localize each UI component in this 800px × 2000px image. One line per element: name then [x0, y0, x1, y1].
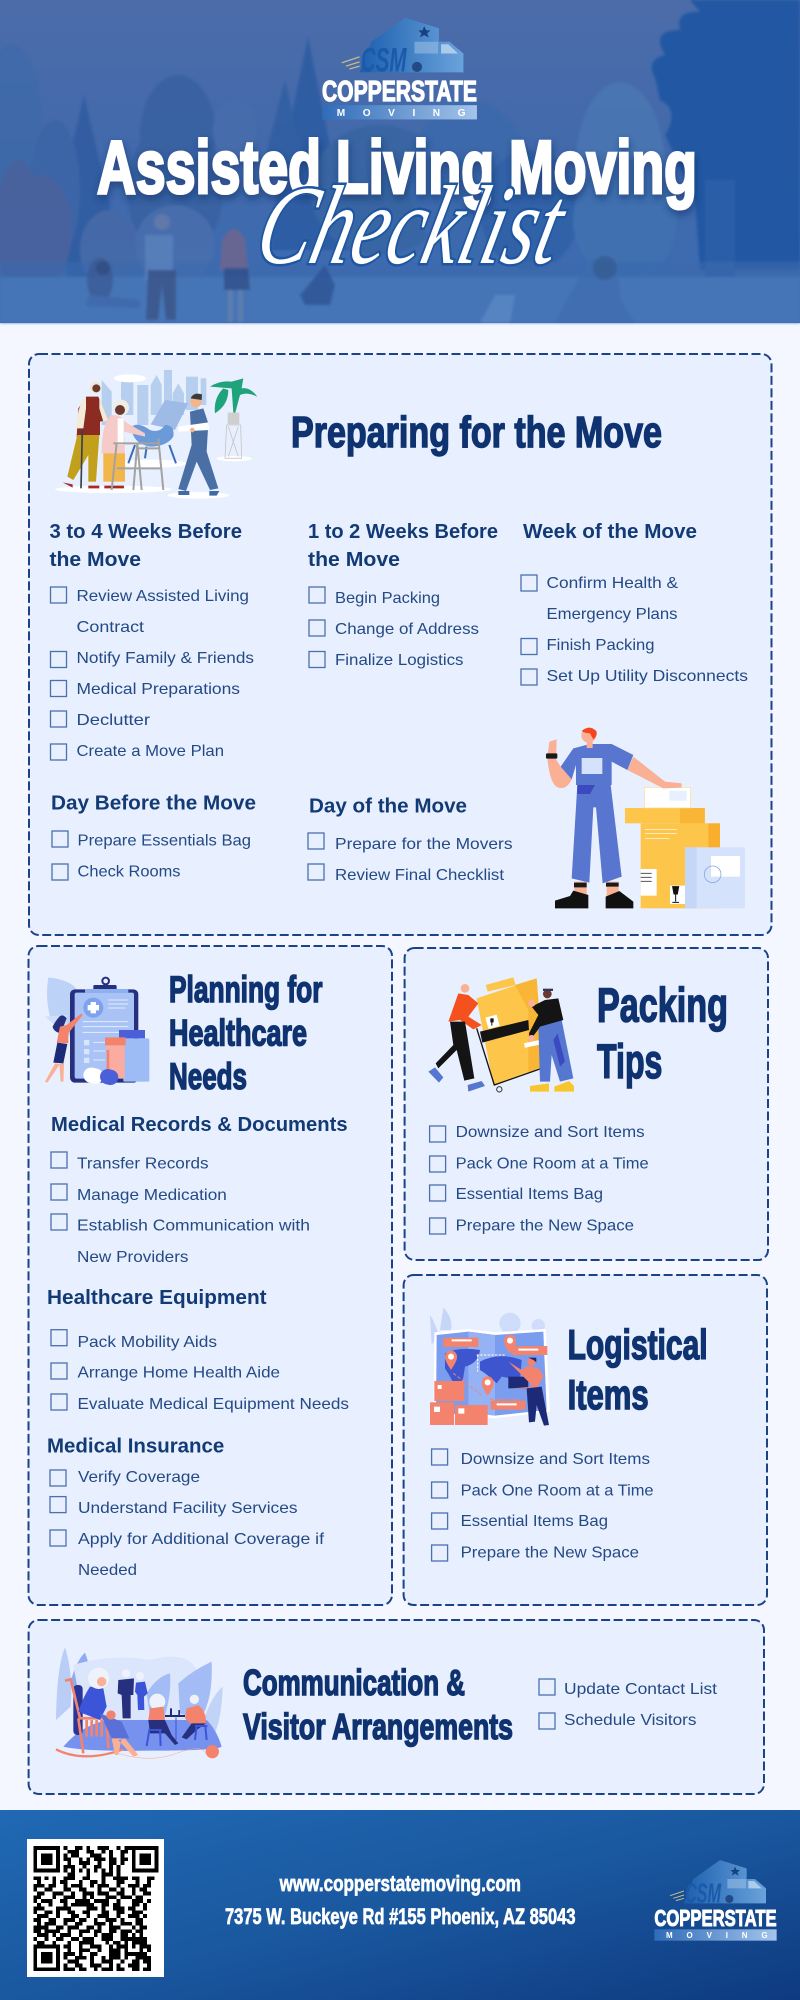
logo: Copperstate Moving: COPPERSTATE — [322, 76, 477, 108]
QR code — [27, 1839, 164, 1977]
item: Finish Packing — [546, 637, 654, 654]
checklist: logistical items — [432, 1449, 654, 1562]
item: Create a Move Plan — [76, 743, 224, 760]
item — [51, 1330, 217, 1351]
item: Pack One Room at a Time — [456, 1156, 649, 1172]
subheading: the Move — [308, 549, 400, 571]
item: Schedule Visitors — [564, 1712, 696, 1729]
panel: packing tips — [405, 948, 768, 1260]
item: Confirm Health & — [546, 575, 678, 592]
people in the park — [85, 214, 635, 323]
heading: Planning for Healthcare Needs: Healthcare — [169, 1012, 307, 1053]
checklist: healthcare equipment — [47, 1287, 349, 1413]
illustration: mover with stacked boxes — [546, 728, 745, 908]
checklist: day before the move — [51, 793, 256, 880]
logo: Copperstate Moving: MOVING — [666, 1931, 768, 1940]
subheading: Healthcare Equipment — [47, 1287, 267, 1309]
item — [50, 711, 151, 729]
item: Downsize and Sort Items — [456, 1124, 645, 1141]
item: Update Contact List — [564, 1681, 718, 1698]
item: Verify Coverage — [78, 1469, 200, 1486]
checklist: day of the move — [308, 796, 512, 884]
heading: Planning for Healthcare Needs: Planning for — [169, 969, 322, 1010]
item: Emergency Plans — [546, 606, 678, 623]
heading: Communication & Visitor Arrangements: Visitor Arrangements — [243, 1706, 513, 1747]
park scenery background — [0, 0, 800, 323]
website and address: 7375 W. Buckeye Rd #155 Phoenix, AZ 85043 — [225, 1904, 576, 1929]
illustration: movers with large box — [428, 977, 574, 1092]
checklist: medical insurance — [47, 1436, 325, 1579]
logo: Copperstate Moving: CSM — [685, 1878, 722, 1909]
item: Check Rooms — [78, 864, 180, 880]
panel: planning for healthcare needs — [28, 946, 392, 1605]
item: Understand Facility Services — [78, 1500, 298, 1517]
item: Essential Items Bag — [461, 1513, 608, 1530]
item: Begin Packing — [335, 590, 440, 607]
heading: Packing Tips: Tips — [597, 1036, 662, 1089]
item: Prepare the New Space — [456, 1218, 634, 1234]
item: Prepare for the Movers — [335, 836, 512, 853]
item: Arrange Home Health Aide — [78, 1364, 280, 1382]
footer — [0, 1810, 800, 2000]
item — [309, 587, 440, 607]
illustration: seniors knitting and playing chess — [56, 1647, 223, 1758]
item — [51, 1152, 209, 1172]
checklist: 3 to 4 weeks before — [50, 521, 254, 760]
subheading: Day of the Move — [309, 796, 467, 818]
website and address: www.copperstatemoving.com — [279, 1871, 521, 1896]
heading: Packing Tips: Packing — [597, 980, 728, 1032]
illustration: clipboard and medicine — [45, 977, 149, 1086]
item: Manage Medication — [77, 1187, 227, 1204]
logo: Copperstate Moving: CSM — [361, 42, 407, 80]
logo: Copperstate Moving — [322, 18, 477, 119]
item: New Providers — [77, 1249, 188, 1266]
hero banner — [0, 0, 800, 323]
item: Evaluate Medical Equipment Needs — [78, 1396, 349, 1413]
item: Review Assisted Living — [76, 588, 249, 605]
item: Change of Address — [335, 621, 479, 638]
item: Pack One Room at a Time — [461, 1482, 654, 1500]
checklist: medical records and documents — [51, 1114, 348, 1266]
logo: Copperstate Moving — [654, 1860, 777, 1941]
heading: Logistical Items: Logistical — [568, 1321, 708, 1368]
subheading: 3 to 4 Weeks Before — [50, 521, 242, 543]
item — [50, 1530, 325, 1579]
item: Finalize Logistics — [335, 652, 464, 669]
heading: Communication & Visitor Arrangements — [243, 1662, 513, 1747]
title script: Checklist: Checklist — [246, 164, 578, 288]
item: Pack Mobility Aids — [78, 1334, 217, 1351]
heading: Preparing for the Move: Preparing for the Move — [291, 408, 662, 457]
item: Transfer Records — [77, 1156, 209, 1172]
item: Needed — [78, 1562, 137, 1579]
item — [51, 1214, 310, 1266]
item — [51, 1184, 227, 1204]
logo: Copperstate Moving: MOVING — [337, 108, 466, 119]
item: Prepare Essentials Bag — [78, 832, 251, 850]
checklist: 1 to 2 weeks before — [308, 521, 498, 669]
item: Set Up Utility Disconnects — [546, 668, 748, 685]
item: Declutter — [76, 712, 151, 729]
heading: Logistical Items: Items — [568, 1371, 649, 1418]
subheading: 1 to 2 Weeks Before — [308, 521, 498, 543]
heading: Packing Tips — [597, 980, 728, 1089]
item: Apply for Additional Coverage if — [78, 1531, 325, 1548]
subheading: the Move — [50, 549, 141, 571]
item: Review Final Checklist — [335, 867, 505, 884]
item: Downsize and Sort Items — [461, 1451, 650, 1468]
heading: Logistical Items — [568, 1321, 708, 1418]
panel: communication and visitor arrangements — [29, 1620, 764, 1794]
illustration: map with pins and parcels — [430, 1308, 550, 1426]
item: Medical Preparations — [76, 681, 240, 698]
subheading — [50, 521, 242, 571]
item — [50, 1497, 298, 1517]
subheading: Medical Records & Documents — [51, 1114, 348, 1136]
item: Essential Items Bag — [456, 1186, 603, 1203]
heading: Planning for Healthcare Needs — [169, 969, 322, 1097]
item: Prepare the New Space — [461, 1544, 639, 1562]
item: Establish Communication with — [77, 1218, 310, 1234]
subheading: Day Before the Move — [51, 793, 256, 815]
subheading: Week of the Move — [523, 521, 697, 543]
subheading: Medical Insurance — [47, 1436, 224, 1458]
item — [308, 864, 505, 884]
item — [50, 587, 249, 636]
subheading — [308, 521, 498, 571]
panel: preparing for the move — [29, 354, 772, 935]
heading: Planning for Healthcare Needs: Needs — [169, 1056, 247, 1097]
panel: logistical items — [404, 1275, 767, 1605]
illustration: seniors with nurse and walker — [55, 370, 257, 499]
website and address — [225, 1871, 576, 1929]
item: Notify Family & Friends — [76, 650, 254, 667]
checklist: week of the move — [521, 521, 748, 685]
checklist: packing tips — [430, 1124, 649, 1234]
item — [521, 575, 678, 623]
checklist: visitor arrangements — [539, 1679, 718, 1729]
item — [308, 833, 512, 853]
item: Contract — [76, 619, 145, 636]
heading: Communication & Visitor Arrangements: Communication & — [243, 1662, 465, 1703]
